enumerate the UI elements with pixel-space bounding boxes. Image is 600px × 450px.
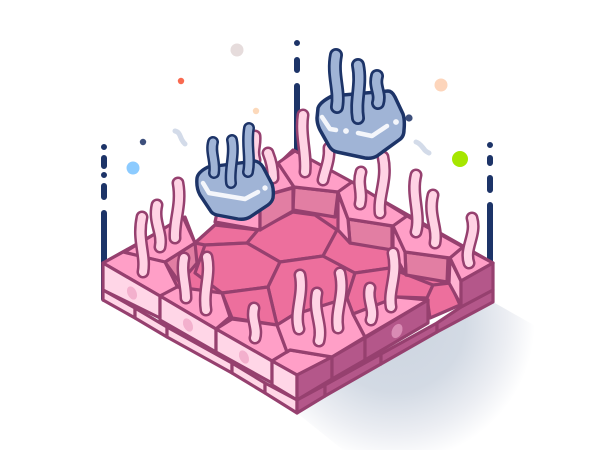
right front wall bbox=[297, 263, 493, 413]
squiggles bbox=[175, 131, 429, 153]
nuclei bbox=[125, 285, 251, 365]
tissue block bbox=[103, 150, 493, 413]
mid cells bbox=[195, 212, 460, 325]
infographic: epithelial tissue with jelly-like microbes bbox=[101, 40, 523, 450]
nucleus bbox=[389, 322, 405, 340]
base of the top surface bbox=[103, 150, 493, 375]
floating dots bbox=[126, 44, 468, 174]
tentacles: front row bbox=[183, 253, 394, 341]
centre dashed line bbox=[294, 43, 300, 156]
large jelly bbox=[317, 55, 404, 158]
small jelly bbox=[197, 128, 273, 219]
tentacles: back row bbox=[268, 115, 473, 263]
top cells bbox=[103, 151, 493, 375]
tentacles: left corner bbox=[140, 183, 179, 272]
back wall: cells A, B, C bbox=[165, 163, 461, 305]
left front wall bbox=[103, 263, 297, 413]
left dashed line bbox=[101, 147, 107, 299]
ground shadow bbox=[304, 303, 523, 450]
right dashed line bbox=[487, 145, 493, 265]
